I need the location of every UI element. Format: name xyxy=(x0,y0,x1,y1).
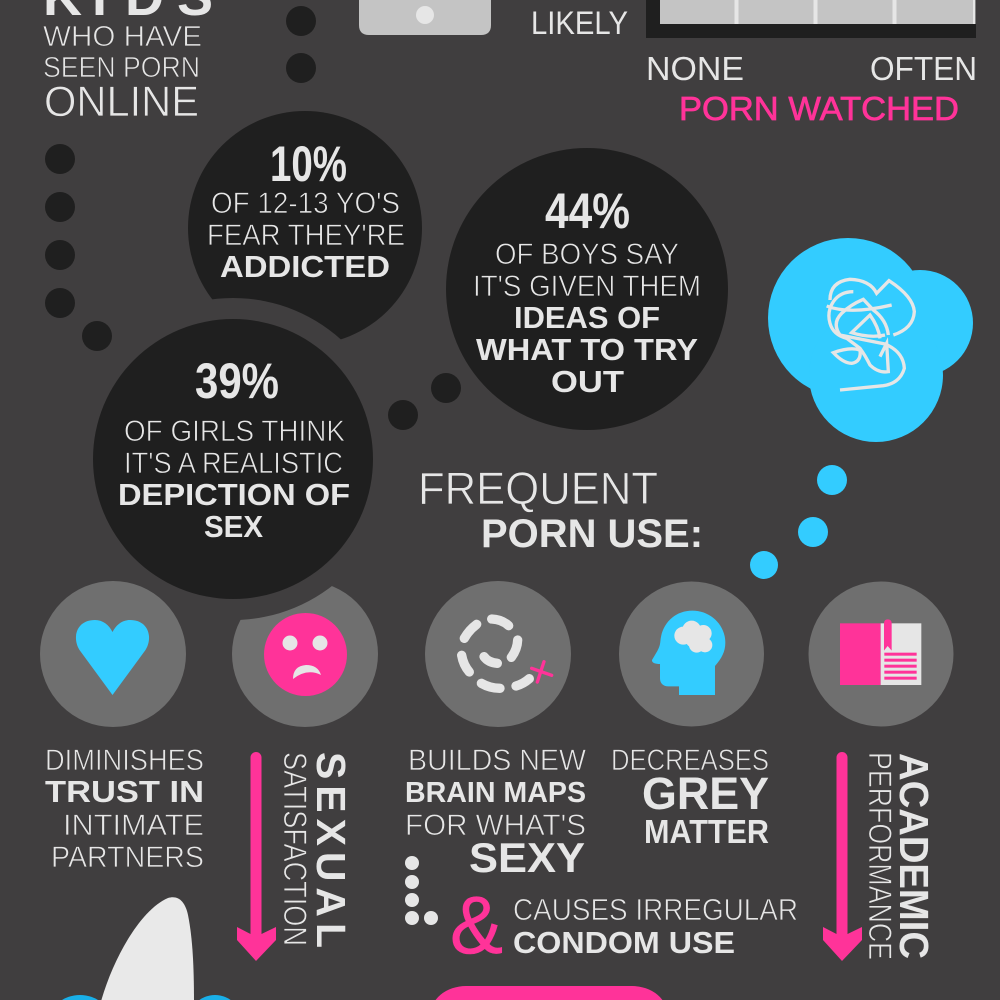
ampersand: & xyxy=(450,880,503,971)
text: causes irregular condom use: CONDOM USE xyxy=(513,925,735,960)
panel: 10% addicted: FEAR THEY'RE xyxy=(207,219,405,252)
text: builds new brain maps: FOR WHAT'S xyxy=(405,809,586,842)
panel: 10% addicted xyxy=(188,111,422,345)
icon: book badge xyxy=(808,582,954,726)
panel: 39% realistic: IT'S A REALISTIC xyxy=(124,447,343,480)
text: diminishes trust xyxy=(45,744,204,874)
dotted trail: left dots xyxy=(45,144,112,351)
panel: 44% ideas: WHAT TO TRY xyxy=(476,332,698,367)
icon: brain map dashes badge xyxy=(425,581,571,727)
text: kids who have seen porn online xyxy=(43,0,213,126)
icon: tangled thought cloud xyxy=(768,238,973,442)
icon: tablet xyxy=(359,0,491,35)
panel: 44% ideas xyxy=(446,148,728,430)
panel: 39% realistic xyxy=(93,319,373,599)
text: decreases grey matter: GREY xyxy=(642,768,769,819)
text: kids who have seen porn online: WHO HAVE xyxy=(43,21,202,53)
panel: 10% addicted: 10% xyxy=(270,136,347,192)
text: kids who have seen porn online: SEEN PORN xyxy=(43,52,200,84)
panel: 39% realistic: 39% xyxy=(195,353,279,409)
panel: 44% ideas: OF BOYS SAY xyxy=(495,238,679,271)
panel: 44% ideas: IT'S GIVEN THEM xyxy=(473,270,701,303)
panel: 44% ideas: 44% xyxy=(545,183,630,239)
panel: 39% realistic: SEX xyxy=(204,509,263,544)
text: builds new brain maps: BUILDS NEW xyxy=(408,744,587,777)
vertical text: sexual satisfaction xyxy=(277,752,354,948)
arrow: academic performance down xyxy=(823,752,862,961)
illustration: blue shape right xyxy=(189,995,241,1000)
text: causes irregular condom use: CAUSES IRREGULAR xyxy=(513,892,798,927)
axis label: often: OFTEN xyxy=(870,50,977,87)
panel: 10% addicted: ADDICTED xyxy=(220,249,390,284)
vertical text: academic performance xyxy=(862,752,937,960)
vertical text: sexual satisfaction: SATISFACTION xyxy=(277,752,313,946)
dotted trail: top dots xyxy=(286,6,316,83)
text: kids who have seen porn online: ONLINE xyxy=(44,78,199,126)
text: builds new brain maps xyxy=(405,744,587,881)
text: builds new brain maps: BRAIN MAPS xyxy=(405,777,586,809)
text: decreases grey matter: DECREASES xyxy=(611,744,769,777)
heading: frequent porn use xyxy=(418,463,703,556)
dots connector xyxy=(405,856,438,925)
panel: 39% realistic: OF GIRLS THINK xyxy=(124,415,345,448)
vertical text: academic performance: ACADEMIC xyxy=(891,753,937,959)
illustration: white pointed shape xyxy=(100,897,194,1000)
text: causes irregular condom use xyxy=(513,892,798,960)
illustration: blue shape left xyxy=(50,995,110,1000)
icon: head with brain badge xyxy=(619,582,764,726)
chart: likelihood by porn watched xyxy=(646,0,976,38)
vertical text: sexual satisfaction: SEXUAL xyxy=(308,752,354,948)
text: diminishes trust: PARTNERS xyxy=(51,841,204,874)
thought bubble dots xyxy=(750,465,847,579)
dotted trail: centre dots xyxy=(388,373,461,430)
panel: 44% ideas: IDEAS OF xyxy=(514,300,660,335)
axis label: none: NONE xyxy=(646,50,744,87)
panel: 10% addicted: OF 12-13 YO'S xyxy=(211,187,400,220)
heading: frequent porn use: PORN USE: xyxy=(481,512,703,556)
arrow: sexual satisfaction down xyxy=(237,752,276,961)
text: builds new brain maps: SEXY xyxy=(469,834,585,881)
text: decreases grey matter: MATTER xyxy=(644,813,769,850)
panel: 39% realistic: DEPICTION OF xyxy=(118,477,350,512)
text: decreases grey matter xyxy=(611,744,769,850)
axis title: porn watched: PORN WATCHED xyxy=(679,90,959,127)
icon: heart badge xyxy=(40,581,186,727)
text: diminishes trust: TRUST IN xyxy=(45,774,204,809)
pink banner xyxy=(430,986,668,1000)
text: diminishes trust: DIMINISHES xyxy=(45,744,204,777)
axis label: likely: LIKELY xyxy=(531,5,628,41)
icon: sad face badge xyxy=(232,581,378,727)
panel: 44% ideas: OUT xyxy=(551,364,624,399)
text: diminishes trust: INTIMATE xyxy=(63,809,204,842)
vertical text: academic performance: PERFORMANCE xyxy=(862,752,898,960)
heading: frequent porn use: FREQUENT xyxy=(418,463,658,514)
